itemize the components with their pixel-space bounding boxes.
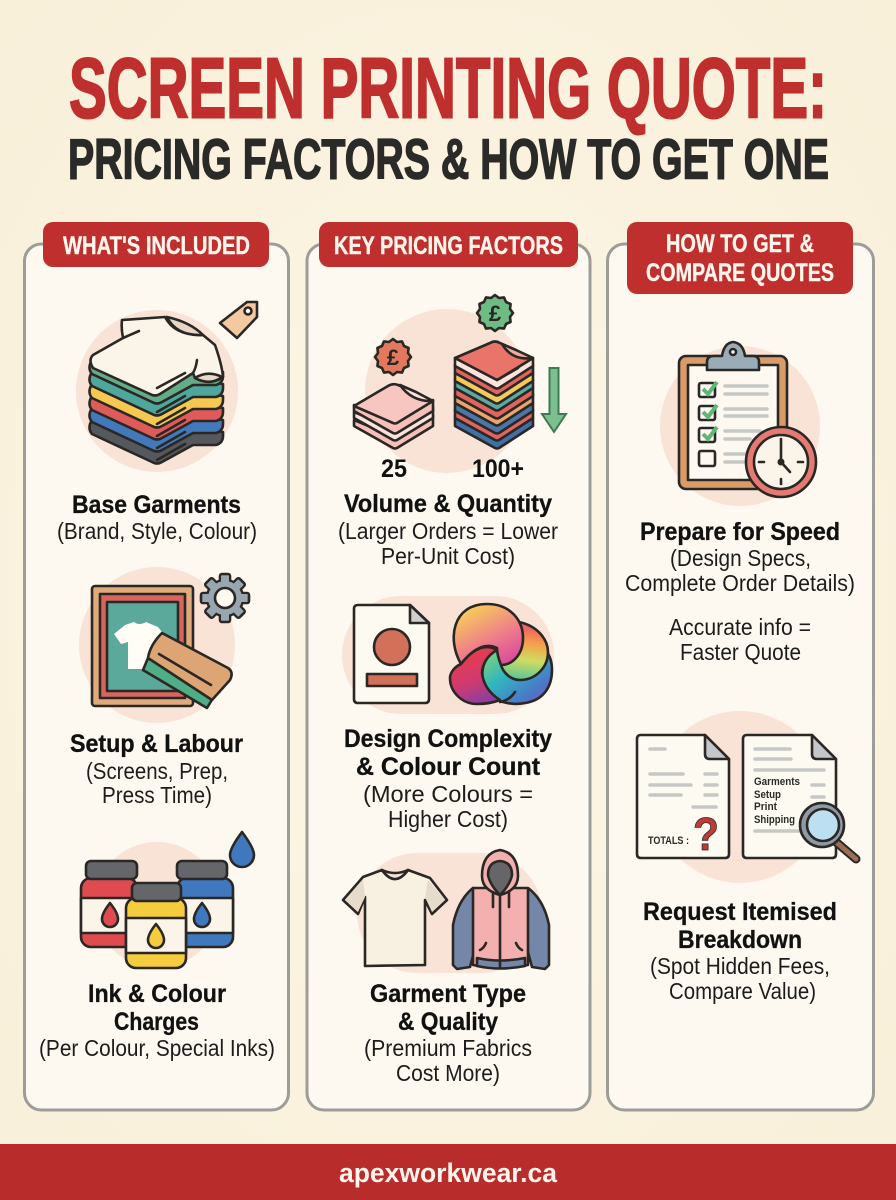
icon: itemised quote document bbox=[743, 735, 836, 858]
text: volume and quantity bbox=[338, 490, 558, 569]
text: setup and labour: (Screens, Prep, bbox=[86, 758, 228, 784]
text: quantity labels: 100+ bbox=[472, 455, 524, 483]
icon: itemised quote document: Garments bbox=[754, 776, 800, 788]
text: prepare for speed bbox=[625, 518, 855, 596]
heading: how to get and compare quotes bbox=[627, 222, 853, 294]
text: setup and labour: Setup & Labour bbox=[70, 730, 243, 758]
text: request itemised breakdown: (Spot Hidden Fees, bbox=[650, 953, 830, 979]
icon: vague quote document: ? bbox=[693, 808, 719, 860]
heading: key pricing factors bbox=[319, 222, 578, 267]
text: prepare for speed: Complete Order Details) bbox=[625, 570, 855, 596]
text: ink and colour charges bbox=[39, 980, 275, 1061]
text: prepare for speed: (Design Specs, bbox=[670, 545, 811, 571]
icon: clipboard and clock bbox=[660, 342, 820, 506]
text: garment type and quality: & Quality bbox=[398, 1008, 498, 1036]
icon: itemised quote document: Shipping bbox=[754, 814, 795, 826]
text: accurate info note: Accurate info = bbox=[669, 614, 811, 640]
title bbox=[68, 42, 829, 192]
icon: itemised quote document: Setup bbox=[754, 789, 781, 801]
icon: small and large order stacks bbox=[354, 295, 566, 473]
panel: how to get and compare quotes bbox=[608, 222, 874, 1110]
icon: itemised quote document: Print bbox=[754, 801, 777, 813]
text: design complexity: & Colour Count bbox=[356, 753, 541, 781]
panel: what's included bbox=[24, 222, 288, 1110]
text: design complexity: (More Colours = bbox=[363, 781, 533, 807]
text: request itemised breakdown: Breakdown bbox=[678, 926, 802, 954]
heading: key pricing factors: KEY PRICING FACTORS bbox=[334, 232, 563, 260]
text: accurate info note: Faster Quote bbox=[680, 639, 801, 665]
text: request itemised breakdown: Request Itemised bbox=[643, 898, 837, 926]
heading: what's included: WHAT'S INCLUDED bbox=[63, 232, 250, 260]
icon: magnifying glass bbox=[800, 803, 856, 859]
text: base garments: Base Garments bbox=[72, 491, 241, 519]
text: design complexity: Design Complexity bbox=[344, 725, 552, 753]
icon: ink jars bbox=[81, 832, 254, 968]
text: volume and quantity: (Larger Orders = Lower bbox=[338, 518, 558, 544]
text: setup and labour: Press Time) bbox=[102, 782, 212, 808]
icon: red price badge bbox=[375, 339, 411, 375]
panel: key pricing factors bbox=[307, 222, 590, 1110]
icon: stacked t-shirts with price tag bbox=[76, 302, 257, 472]
text: request itemised breakdown: Compare Value) bbox=[669, 978, 816, 1004]
text: base garments: (Brand, Style, Colour) bbox=[57, 518, 257, 544]
text: ink and colour charges: Charges bbox=[114, 1008, 199, 1036]
text: ink and colour charges: Ink & Colour bbox=[88, 980, 226, 1008]
icon: vague quote document bbox=[637, 735, 729, 860]
icon: quote documents and magnifier bbox=[637, 711, 856, 883]
text: prepare for speed: Prepare for Speed bbox=[640, 518, 840, 546]
heading: how to get and compare quotes: HOW TO GET & bbox=[666, 230, 814, 258]
icon: green price badge: £ bbox=[489, 301, 502, 326]
text: ink and colour charges: (Per Colour, Special Inks) bbox=[39, 1035, 275, 1061]
text: garment type and quality: Cost More) bbox=[396, 1060, 500, 1086]
icon: vague quote document: TOTALS : bbox=[648, 835, 689, 847]
text: garment type and quality bbox=[364, 980, 532, 1086]
icon: colour swirl bbox=[450, 604, 552, 704]
text: garment type and quality: Garment Type bbox=[370, 980, 526, 1008]
text: setup and labour bbox=[70, 730, 243, 808]
text: quantity labels: 25 bbox=[381, 455, 407, 483]
text: request itemised breakdown bbox=[643, 898, 837, 1004]
text: accurate info note bbox=[669, 614, 811, 665]
text: volume and quantity: Per-Unit Cost) bbox=[381, 543, 515, 569]
footer bar bbox=[0, 1144, 896, 1200]
heading: what's included bbox=[43, 222, 269, 267]
arrow: cost decreases bbox=[542, 368, 566, 432]
icon: screen frame and squeegee bbox=[79, 567, 249, 723]
icon: green price badge bbox=[477, 295, 513, 331]
footer bar: apexworkwear.ca bbox=[339, 1158, 558, 1188]
icon: red price badge: £ bbox=[387, 345, 400, 370]
icon: gear bbox=[201, 574, 249, 622]
text: volume and quantity: Volume & Quantity bbox=[344, 490, 552, 518]
icon: t-shirt and hoodie bbox=[343, 850, 549, 973]
icon: design file and colour wheel bbox=[342, 596, 554, 714]
text: design complexity bbox=[344, 725, 552, 832]
text: design complexity: Higher Cost) bbox=[388, 806, 508, 832]
text: base garments bbox=[57, 491, 257, 544]
text: quantity labels bbox=[381, 455, 524, 483]
text: garment type and quality: (Premium Fabrics bbox=[364, 1035, 532, 1061]
heading: how to get and compare quotes: COMPARE QUOTES bbox=[646, 259, 834, 287]
